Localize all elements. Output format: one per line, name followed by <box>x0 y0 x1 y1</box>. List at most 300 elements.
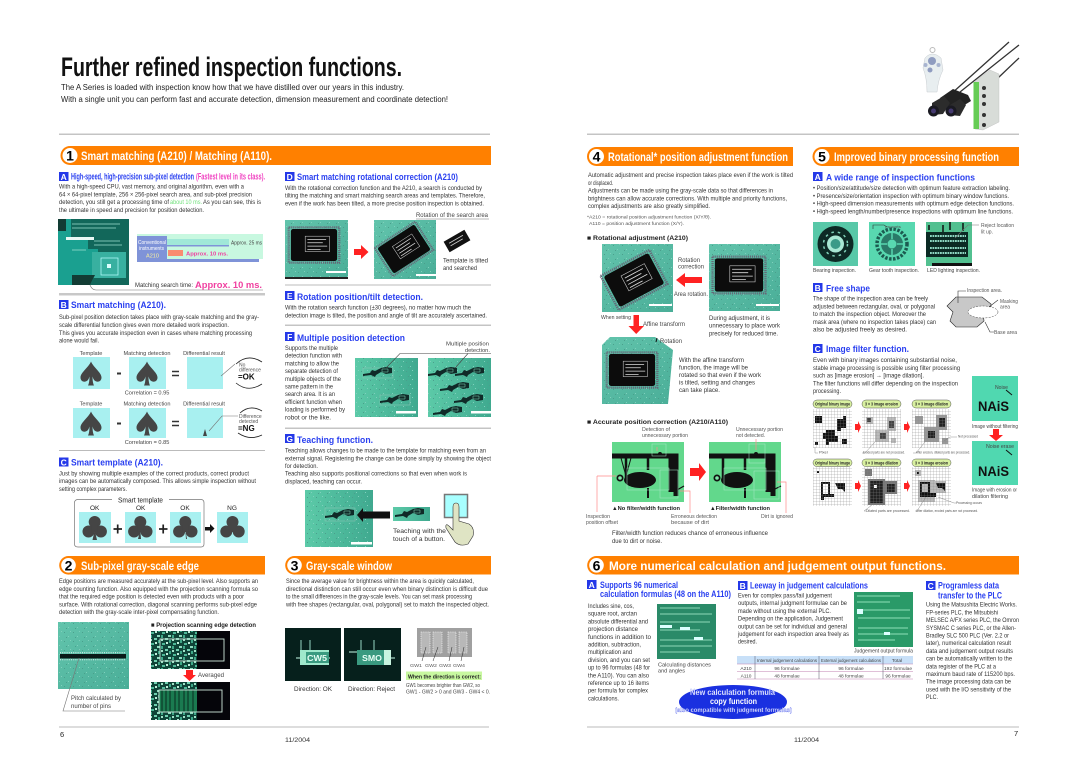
section 3 text <box>285 578 489 608</box>
section header 4: 4 <box>593 148 601 164</box>
subsection B heading: B <box>61 300 67 310</box>
subsection A heading: Supports 96 numerical <box>600 580 678 590</box>
screenshot: judgement output formula: Judgement output formula <box>854 648 913 654</box>
diagram: filter/width function: ▲Filter/width function <box>710 506 770 512</box>
callout: matching search time: Approx. 10 ms. <box>195 280 262 291</box>
photos: rotational adjustment: precisely for reduced time. <box>709 330 778 337</box>
photo: direction reject: SMO <box>362 654 382 663</box>
subsection B text <box>59 314 259 344</box>
diagram: differential match OK <box>73 351 262 396</box>
photo: bearing inspection: Bearing inspection. <box>813 268 856 274</box>
subsection F text: separate detection of <box>285 368 338 375</box>
photo: pin pitch <box>58 622 129 711</box>
subsection C text: used with the I/O sensitivity of the <box>926 686 1011 693</box>
bar chart: processing time comparison: instruments <box>139 246 164 252</box>
diagram: free shape: Masking <box>1000 299 1018 305</box>
section 2 text <box>59 578 258 616</box>
subsection A text: addition, subtraction, <box>588 642 641 648</box>
diagram: differential match NG: =NG <box>238 424 255 433</box>
photos: rotational adjustment: is tilted, setting and changes <box>679 380 756 386</box>
subsection A text: multiplication and <box>588 649 632 656</box>
subsection C text: such as [image erosion] → [image dilation]. <box>813 373 924 380</box>
subsection F text: robot or the like. <box>285 414 331 421</box>
subsection C heading: Image filter function. <box>826 344 909 354</box>
panel 5: improved binary processing <box>812 147 1019 513</box>
product photo: remote, cameras and controller <box>923 42 1019 130</box>
section 2 text: edge counting function. Also equipped with the projection scanning formula so <box>59 586 258 593</box>
subsection G heading: Teaching function. <box>297 435 373 445</box>
photos: NAIS noise filtering: Noise erase <box>986 444 1014 450</box>
table: judgement calculations: Total <box>892 658 902 664</box>
title: Further refined inspection functions. <box>61 52 402 82</box>
subsection A heading: A <box>815 172 821 182</box>
subsection B text: Sub-pixel position detection takes place with gray-scale matching and the gray- <box>59 314 259 321</box>
photo: LED lighting inspection <box>926 222 1014 274</box>
panel 3: gray-scale window <box>285 556 491 696</box>
subsection F heading: Multiple position detection <box>297 333 405 343</box>
subsection C text: The filter functions will differ depending on the inspection <box>813 380 958 387</box>
subsection C heading: C <box>928 581 934 591</box>
section header 5: 5 <box>818 148 826 164</box>
subsection C text: images can be automatically composed. This allows simple inspection without <box>59 478 256 485</box>
subsection C heading: C <box>815 344 821 354</box>
filter grids: erosion then dilation: 3 × 3 image erosion <box>865 402 898 407</box>
footer right: 7 <box>1014 729 1018 738</box>
subsection E heading: Rotation position/tilt detection. <box>297 292 423 302</box>
diagram: differential match NG: Matching detection <box>124 402 170 408</box>
bar chart: processing time comparison: Approx. 10 ms. <box>186 252 228 258</box>
diagram: no filter/width function <box>586 427 717 526</box>
diagram: differential match NG: Difference <box>239 414 262 420</box>
subsection A text: per formula for complex <box>588 688 649 695</box>
diagram: differential match OK: Template <box>80 351 102 357</box>
subsection C text: PLC. <box>926 694 938 701</box>
subsection A text: the ultimate in speed and precision for position detection. <box>59 207 204 214</box>
photos: rotational adjustment: function, the image will be <box>679 364 748 372</box>
subsection C heading: Programless data <box>938 580 1000 590</box>
subsection F text <box>285 345 346 421</box>
subsection F text: detection function with <box>285 353 342 360</box>
footer right <box>587 726 1019 744</box>
footer left: 6 <box>60 730 64 739</box>
subsection B text <box>813 296 936 334</box>
section header 6: More numerical calculation and judgement output functions. <box>609 561 946 573</box>
diagram: no filter/width function: Erroneous detection <box>671 514 717 520</box>
photos: rotational adjustment: unnecessary to place work <box>709 323 781 330</box>
top divider left <box>59 134 490 135</box>
diagram: free shape: Inspection area. <box>967 288 1002 294</box>
filter grids: dilation then erosion: Processing occurs <box>956 500 982 505</box>
diagram: no filter/width function: Detection of <box>642 427 671 433</box>
panel 4: rotational position adjustment <box>586 147 793 545</box>
diagram: smart template: Smart template <box>118 498 163 504</box>
section header 4: Rotational* position adjustment function <box>608 152 788 164</box>
subsection C text: data and judgement output results <box>926 648 1014 655</box>
photos: rotational adjustment <box>601 244 781 404</box>
screenshot: matching search <box>58 219 129 285</box>
subsection C heading <box>926 580 1002 600</box>
subsection A text: division, and you can set <box>588 657 650 664</box>
subsection E text <box>285 304 487 319</box>
subsection B text: Even for complex pass/fail judgement <box>738 592 832 600</box>
section 2 text: surface. With rotational correction, diagonal scanning performs sub-pixel edge <box>59 601 257 608</box>
subsection B heading <box>813 283 870 294</box>
filter grids: erosion then dilation: Eroded parts are not processed. <box>863 450 905 454</box>
subsection B text: desired. <box>738 639 757 646</box>
subsection F heading: F <box>287 332 292 342</box>
table: judgement calculations: 96 formulae <box>838 666 864 672</box>
photos: NAIS noise filtering: dilation filtering <box>972 494 1008 500</box>
photos: rotational adjustment: During adjustment, it is <box>709 315 771 322</box>
table: judgement calculations: 48 formulae <box>774 674 800 680</box>
photos: NAIS noise filtering <box>972 376 1018 500</box>
photos: rotational adjustment: Affine transform <box>643 322 685 328</box>
subsection G text <box>285 448 491 485</box>
subsection F text: search area. It is an <box>285 391 335 398</box>
table: judgement calculations: 48 formulae <box>838 674 864 680</box>
subsection A text: reference up to 16 items <box>588 680 650 687</box>
diagram: gray windows GW1 to GW4: GW4 <box>453 663 465 669</box>
photos: NAIS noise filtering: NAiS <box>978 398 1009 414</box>
section header 4 <box>587 147 793 166</box>
footnote: function definitions: A110 = position adjustment function (X/Y). <box>589 221 684 227</box>
subsection B text: The shape of the inspection area can be freely <box>813 296 929 303</box>
subsection A text: about 10 ms. <box>170 199 202 206</box>
subsection A text: As you can see, this is <box>203 199 262 206</box>
diagram: smart template: OK <box>90 505 100 512</box>
arrow: filter comparison <box>690 463 706 481</box>
diagram: differential match NG: Template <box>80 402 102 408</box>
subsection C text: Bradley SLC 500 PLC (Ver. 2.2 or <box>926 632 1010 640</box>
table: judgement calculations: A110 <box>741 674 752 680</box>
subsection B text: mask area (where no inspection takes place) can <box>813 319 936 326</box>
subsection B heading: Leeway in judgement calculations <box>750 580 868 590</box>
subsection F text: efficient function when <box>285 399 342 406</box>
photos: rotational adjustment: When setting <box>601 315 631 321</box>
diagram: no filter/width function: Inspection <box>586 514 610 520</box>
heading: accurate position correction: ■ Accurate position correction (A210/A110) <box>587 419 728 426</box>
section header 3: 3 <box>291 557 299 573</box>
section 3 text: to the small differences in the gray-scale levels. You can set mask processing <box>286 594 472 600</box>
subsection B text: judgement for each inspection area freely as <box>737 631 850 638</box>
subsection C text: FP-series PLC, the Mitsubishi <box>926 609 998 616</box>
section 2 text: Edge positions are measured accurately at the sub-pixel level. Also supports an <box>59 578 258 585</box>
section header 2: 2 <box>65 557 73 573</box>
photos: multiple position detection <box>355 342 491 417</box>
subsection G text: for detection. <box>285 463 318 470</box>
footer left: 11/2004 <box>285 737 310 744</box>
diagram: no filter/width function: ▲No filter/width function <box>612 506 680 512</box>
callout: matching search time <box>90 280 263 291</box>
panel 2: sub-pixel gray-scale edge <box>58 556 265 720</box>
diagram: differential match OK: Matching detection <box>124 351 170 357</box>
subsection A text: functions in addition to <box>588 634 651 641</box>
photos: multiple position detection: detection. <box>465 348 490 354</box>
diagram: projection scanning edge detection: ■ Projection scanning edge detection <box>151 622 256 629</box>
subsection C text: data register of the PLC at a <box>926 663 996 670</box>
photo: direction OK: CW5 <box>307 654 328 663</box>
subsection A text <box>588 603 651 702</box>
section header 3: Gray-scale window <box>306 561 392 573</box>
section header 1: 1 <box>66 148 74 164</box>
panel 6: numerical calculation and judgement output <box>587 556 1019 719</box>
screenshot: calculating distances: Calculating distances <box>658 662 711 668</box>
subsection B text: outputs, internal judgment formulae can be <box>738 600 847 607</box>
diagram: differential match OK: =OK <box>238 372 255 382</box>
photo: direction OK <box>285 628 341 693</box>
photo: gear tooth inspection: Gear tooth inspection. <box>869 268 919 274</box>
diagram: no filter/width function: unnecessary portion <box>642 433 688 439</box>
table: judgement calculations: 96 formulae <box>885 674 911 680</box>
callout: matching search time: Matching search time: <box>135 282 193 289</box>
bar chart: processing time comparison: A210 <box>146 254 159 260</box>
photo: LED lighting inspection: LED lighting inspection. <box>927 268 980 274</box>
bullet list <box>813 185 1014 215</box>
footer left <box>59 726 489 744</box>
photo: gear tooth inspection: mounts <box>885 224 901 229</box>
subsection C heading: C <box>61 458 67 468</box>
subsection D text: even if the work has been tilted, a more precise position inspection is obtained. <box>285 200 484 207</box>
section 4 text: complex adjustments are also greatly simplified. <box>588 203 710 210</box>
subsection B text: to match the inspection object. Moreover the <box>813 311 926 318</box>
caption: filter/width function: due to dirt or noise. <box>612 538 662 545</box>
filter grids: dilation then erosion: Dilated parts are processed. <box>866 508 910 513</box>
subsection A heading: A <box>61 172 67 182</box>
diagram: teaching with a button: Teaching with the <box>393 528 446 535</box>
diagram: smart template: NG <box>227 505 237 512</box>
bullet list: • Position/size/attitude/size detection with optimum feature extraction labeling. <box>813 185 1010 192</box>
subsection C text: can be automatically written to the <box>926 656 1012 663</box>
section 4 text: brightness can allow accurate corrections. With multiple and priority functions, <box>588 196 787 202</box>
photos: rotational correction: Rotation of the search area <box>416 213 489 219</box>
photos: NAIS noise filtering: NAiS <box>978 463 1009 479</box>
diagram: free shape <box>947 288 1018 336</box>
subsection C text: later), numerical calculation result <box>926 640 1011 647</box>
subsection E text: With the rotation search function (±30 degrees), no matter how much the <box>285 304 471 312</box>
subsection C text: Even with binary images containing substantial noise, <box>813 357 957 364</box>
filter grids: erosion then dilation <box>813 400 978 454</box>
photos: NAIS noise filtering: Image without filtering <box>972 424 1018 430</box>
footer right: 11/2004 <box>794 737 819 744</box>
subsection B text: scale differential function gives even more detailed work inspection. <box>59 322 229 329</box>
subsection E text: detection image is tilted, the position and angle of tilt are accurately ascertained. <box>285 312 487 319</box>
subsection B text: output can be set for individual and general <box>738 623 847 630</box>
subsection A heading <box>587 580 731 599</box>
bullet list: • Presence/size/orientation inspection with optimum binary window functions. <box>813 193 1009 200</box>
photos: rotational adjustment: With the affine transform <box>679 357 744 364</box>
subsection B text <box>737 592 850 646</box>
subsection G heading: G <box>286 434 293 444</box>
filter grids: erosion then dilation: Not processed <box>958 434 978 438</box>
diagram: projection scanning edge detection <box>151 622 256 720</box>
subsection A text: square root, arctan <box>588 611 637 618</box>
subsection A text: up to 96 formulas (48 for <box>588 665 651 672</box>
filter grids: erosion then dilation: After erosion, dilated parts are processed. <box>916 450 970 454</box>
subsection C heading: Smart template (A210). <box>71 458 163 468</box>
section 4 text: Automatic adjustment and precise inspection takes place even if the work is tilted <box>588 172 793 179</box>
section 4 text <box>588 172 793 210</box>
photos: rotational adjustment: can take place. <box>679 387 720 394</box>
subsection G text: external signal. Registering the change can be done simply by showing the object <box>285 455 491 462</box>
table: judgement calculations: 192 formulae <box>884 666 912 672</box>
subsection B text: adjusted between rectangular, oval, or polygonal <box>813 303 935 310</box>
section header 5 <box>812 147 1019 166</box>
diagram: filter/width function: not detected. <box>736 433 765 439</box>
subsection D heading: D <box>287 172 293 182</box>
photos: NAIS noise filtering: Image with erosion or <box>972 488 1017 494</box>
subsection C text: Just by showing multiple examples of the correct products, correct product <box>59 470 249 478</box>
subsection G text: displaced, teaching can occur. <box>285 478 362 485</box>
photos: rotational adjustment: Rotation <box>678 258 700 264</box>
table: judgement calculations: 96 formulae <box>774 666 800 672</box>
subsection G text: Teaching also supports positional corrections so that even when work is <box>285 471 468 478</box>
section 3 text: Since the average value for brightness within the area is quickly calculated, <box>286 578 474 585</box>
diagram: differential match NG: Differential result <box>183 402 225 408</box>
subsection A text: With a high-speed CPU, vast memory, and original algorithm, even with a <box>59 184 244 190</box>
filter grids: dilation then erosion: After dilation, eroded parts are not processed. <box>916 508 978 513</box>
diagram: gray windows GW1 to GW4: GW2 <box>425 663 437 669</box>
diagram: smart template: OK <box>136 505 146 512</box>
photos: rotational adjustment: rotated so that even if the work <box>679 372 762 379</box>
diagram: teaching with a button: touch of a button. <box>393 536 445 543</box>
diagram: smart template: OK <box>180 505 190 512</box>
subsection C text: The image processing data can be <box>926 679 1011 686</box>
bullet list: • High-speed length/number/presence inspections with optimum line functions. <box>813 208 1013 215</box>
section 3 text: directional distinction can still occur even when binary distinction is difficult due <box>286 586 488 593</box>
diagram: differential match NG: detected <box>239 419 258 425</box>
diagram: teaching with a button <box>305 490 474 547</box>
photos: multiple position detection: Multiple position <box>446 342 489 348</box>
intro text <box>61 83 448 104</box>
filter grids: dilation then erosion: 3 × 3 image dilation <box>865 460 898 466</box>
subsection E heading: E <box>287 291 293 301</box>
subsection C text: processing. <box>813 388 841 395</box>
table: judgement calculations: Internal judgement calculations <box>757 658 818 664</box>
subsection A text <box>59 184 262 214</box>
subsection C text: maximum baud rate of 115200 bps. <box>926 671 1015 678</box>
diagram: projection scanning edge detection: Averaged <box>198 673 224 679</box>
screenshot: judgement output formula <box>854 592 913 654</box>
subsection A text: 64 × 64-pixel template, 256 × 256-pixel search area, and sub-pixel precision <box>59 191 252 198</box>
subsection F text: multiple objects of the <box>285 376 341 383</box>
intro text: The A Series is loaded with inspection know how that we have distilled over our years in this industry. <box>61 83 404 92</box>
diagram: differential match OK: difference <box>239 368 261 374</box>
note: when the direction is correct: When the direction is correct: <box>408 674 481 680</box>
filter grids: dilation then erosion <box>813 459 982 513</box>
subsection B text: made without using the external PLC. <box>738 608 831 615</box>
diagram: no filter/width function: position offset <box>586 520 619 526</box>
section 2 text: that the required edge position is detected even with products with a poor <box>59 594 245 600</box>
section header 6: 6 <box>593 557 601 573</box>
heading: rotational adjustment: ■ Rotational adjustment (A210) <box>587 235 688 242</box>
note: when the direction is correct <box>406 672 490 696</box>
section 3 text: with free shapes (rectangular, oval, polygonal) set to match the inspected object. <box>285 601 489 608</box>
photo: gear tooth inspection <box>869 222 919 274</box>
section header 1: Smart matching (A210) / Matching (A110). <box>81 151 272 163</box>
photo: direction reject: Direction: Reject <box>348 686 395 693</box>
diagram: free shape: Base area <box>994 330 1017 336</box>
subsection C text: setting complex parameters. <box>59 486 127 493</box>
diagram: differential match NG <box>73 402 262 446</box>
filter grids: erosion then dilation: 3 × 3 image dilation <box>915 402 948 407</box>
diagram: gray windows GW1 to GW4 <box>410 628 472 669</box>
subsection B heading: B <box>815 283 821 293</box>
photo: LED lighting inspection: lit up. <box>981 230 993 236</box>
table: judgement calculations <box>737 656 913 680</box>
subsection B heading: Free shape <box>826 284 870 294</box>
screenshot: calculating distances: and angles <box>658 668 685 674</box>
subsection C text <box>813 357 960 395</box>
subsection A heading: A <box>589 580 595 590</box>
subsection A text: calculations. <box>588 695 619 702</box>
photo: pin pitch: Pitch calculated by <box>71 696 121 702</box>
diagram: differential match OK: Differential result <box>183 351 225 357</box>
subsection B heading: Smart matching (A210). <box>71 300 166 310</box>
subsection B text: This gives you accurate inspection even in cases where matching processing <box>59 330 252 337</box>
note: when the direction is correct: GW1 becomes brighter than GW2, so <box>406 683 480 689</box>
photo: direction OK: Direction: OK <box>294 686 333 693</box>
caption: filter/width function <box>612 530 768 545</box>
photos: rotational adjustment: Area rotation. <box>674 292 708 298</box>
section header 6 <box>587 556 1019 575</box>
diagram: filter/width function: Unnecessary portion <box>736 427 783 433</box>
section 4 text: or displaced. <box>588 180 613 187</box>
section header 1 <box>60 146 491 165</box>
photos: rotational correction: Template is tilted <box>443 258 488 264</box>
section header 3 <box>285 556 491 575</box>
photos: rotational adjustment: correction <box>678 264 704 270</box>
filter grids: dilation then erosion: 3 × 3 image erosion <box>915 460 948 466</box>
subsection F text: matching to allow the <box>285 360 339 367</box>
subsection C text: MELSEC A/FX series PLC, the Omron <box>926 617 1019 624</box>
bar chart: processing time comparison: Approx. 25 ms <box>231 240 262 246</box>
diagram: differential match OK: Correlation = 0.95 <box>125 390 169 396</box>
subsection F text: same pattern in the <box>285 384 333 390</box>
subsection D text: With the rotational correction function and the A210, a search is conducted by <box>285 185 483 192</box>
subsection B text: also be adjusted freely as desired. <box>813 326 907 334</box>
photos: NAIS noise filtering: Noise <box>995 385 1008 391</box>
subsection A heading: High-speed, high-precision sub-pixel detection <box>71 172 194 182</box>
diagram: gray windows GW1 to GW4: GW3 <box>439 663 451 669</box>
subsection A text: detection, you still get a processing time of <box>59 199 169 206</box>
subsection C text: Using the Matsushita Electric Works. <box>926 602 1017 609</box>
footnote: function definitions <box>587 214 711 227</box>
panel 1: smart matching <box>58 146 491 547</box>
subsection A heading: (Fastest level in its class). <box>196 172 265 182</box>
subsection B text: alone would fail. <box>59 338 99 344</box>
section header 2 <box>59 556 265 575</box>
top divider right <box>587 134 1019 135</box>
section 4 text: Adjustments can be made using the gray-scale data so that differences in <box>588 188 773 195</box>
diagram: gray windows GW1 to GW4: GW1 <box>410 663 422 669</box>
bullet list: • High-speed dimension measurements with optimum edge detection functions. <box>813 200 1014 208</box>
subsection D text: tilting the matching and smart matching search areas and templates. Therefore, <box>285 193 485 200</box>
photo: pin pitch: number of pins <box>71 704 111 710</box>
diagram: free shape: area <box>1000 304 1010 310</box>
subsection C text: SYSMAC C series PLC, or the Allen- <box>926 625 1016 632</box>
callout: new calculation formula copy function <box>675 685 792 719</box>
table: judgement calculations: External judgement calculations <box>821 658 882 664</box>
diagram: filter/width function: Dirt is ignored <box>761 514 793 520</box>
subsection A heading: A wide range of inspection functions <box>826 172 975 182</box>
diagram: smart template <box>74 498 248 547</box>
subsection F text: Supports the multiple <box>285 345 338 352</box>
filter grids: erosion then dilation: Pixel <box>819 450 828 454</box>
subsection B text: Depending on the application, Judgement <box>738 616 843 623</box>
caption: filter/width function: Filter/width function reduces chance of erroneous influence <box>612 530 768 537</box>
subsection D text <box>285 185 485 207</box>
diagram: no filter/width function: because of dirt <box>671 520 710 526</box>
